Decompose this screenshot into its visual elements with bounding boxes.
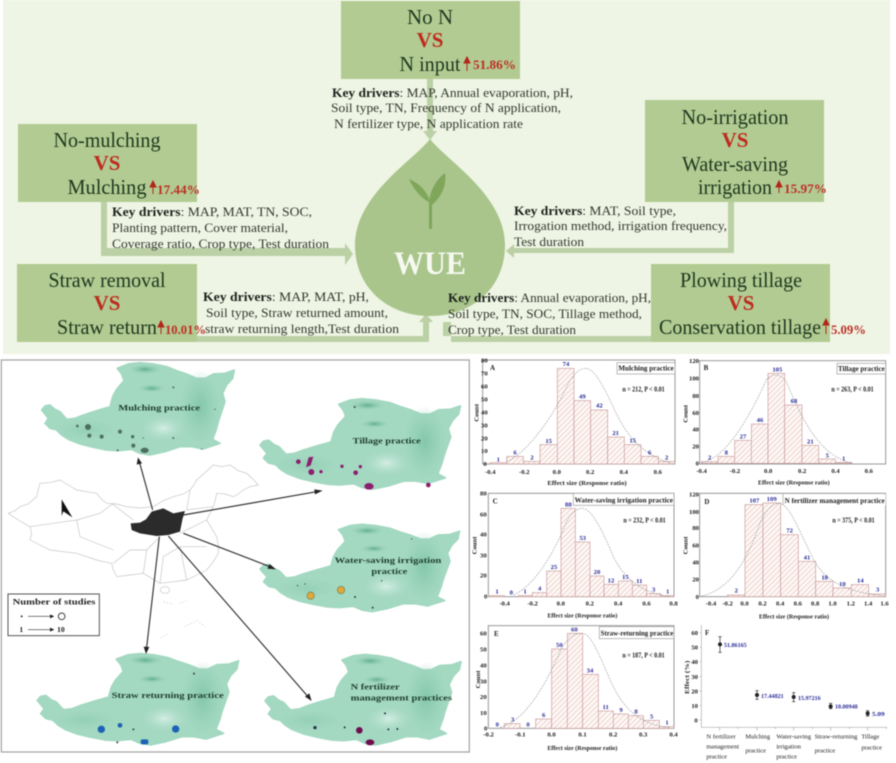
chart F: effect size by practice: 17.44821 — [761, 693, 784, 700]
chart D: N fertilizer histogram: 120 — [689, 491, 700, 498]
text: tillage key drivers: Crop type, Test duration — [448, 322, 576, 337]
chart F: effect size by practice — [684, 625, 887, 760]
chart C: water-saving irrigation histogram: 1 — [495, 589, 499, 596]
label: WUE: WUE — [394, 246, 466, 282]
chart D: N fertilizer histogram: 1.6 — [880, 601, 889, 608]
chart F: effect size by practice: 30 — [691, 674, 699, 681]
box: irrigation: VS — [722, 128, 748, 152]
arrow: conservation tillage to WUE — [440, 314, 665, 342]
chart E: straw returning histogram: Effect size (Response ratio) — [547, 745, 617, 752]
site dots — [76, 386, 216, 453]
map: mulching practice: Mulching practice — [118, 403, 200, 413]
chart B: tillage histogram: 60 — [692, 410, 700, 417]
box: tillage — [651, 264, 866, 342]
box: straw return — [17, 264, 206, 342]
map: water-saving irrigation practice: Water-saving irrigation — [335, 555, 442, 565]
chart A: mulching histogram: 0 — [483, 461, 487, 468]
text: tillage key drivers: Key drivers: Annual evaporation, pH, — [448, 290, 651, 305]
chart B: tillage histogram: 1 — [842, 455, 845, 462]
text: straw key drivers — [203, 289, 400, 336]
chart F: effect size by practice: 60 — [691, 630, 699, 637]
box: irrigation: No-irrigation — [682, 105, 789, 129]
chart C: water-saving irrigation histogram: Count — [472, 536, 479, 554]
chart C: water-saving irrigation histogram: 88 — [565, 502, 572, 509]
chart A: mulching histogram: 20 — [481, 435, 488, 442]
legend: number of studies — [8, 594, 99, 636]
legend: number of studies: 1 — [19, 625, 23, 634]
chart F: effect size by practice: 50 — [691, 645, 699, 652]
chart A: mulching histogram: 0.6 — [654, 469, 663, 476]
box: N input: N input — [400, 52, 461, 76]
chart D: N fertilizer histogram: -0.4 — [706, 601, 717, 608]
chart C: water-saving irrigation histogram: Effect size (Response ratio) — [547, 612, 617, 619]
chart A: mulching histogram: 2 — [665, 454, 669, 461]
chart E: straw returning histogram: 0.1 — [578, 732, 587, 739]
chart D: N fertilizer histogram: Effect size (Response ratio) — [759, 613, 829, 620]
chart E: straw returning histogram: Straw-returning practice — [601, 629, 673, 637]
chart D: N fertilizer histogram: 0.0 — [740, 601, 749, 608]
chart D: N fertilizer histogram: 1.2 — [847, 601, 856, 608]
chart F: effect size by practice: management — [706, 743, 739, 750]
text: mulching key drivers — [112, 204, 330, 251]
chart F: effect size by practice: practice — [745, 748, 766, 755]
chart E: straw returning histogram: 60 — [571, 626, 578, 633]
text: mulching key drivers: Key drivers: MAP, MAT, TN, SOC, — [112, 204, 312, 219]
chart D: N fertilizer histogram: 2 — [735, 588, 739, 595]
chart B: tillage histogram: 0 — [696, 461, 700, 468]
text: straw key drivers: straw returning length,Test duration — [205, 321, 400, 336]
chart F: effect size by practice: practice — [776, 753, 797, 760]
box: irrigation: Water-saving — [682, 152, 788, 176]
chart A: mulching histogram: 80 — [481, 358, 488, 365]
chart D: N fertilizer histogram: 10 — [839, 581, 846, 588]
chart A: mulching histogram — [474, 358, 675, 487]
chart F: effect size by practice: 10 — [691, 703, 699, 710]
chart E: straw returning histogram: 0.2 — [609, 732, 618, 739]
chart D: N fertilizer histogram: 20 — [692, 577, 700, 584]
chart C: water-saving irrigation histogram: 53 — [579, 535, 587, 542]
box: mulching: Mulching — [68, 175, 147, 199]
site dots — [296, 457, 431, 490]
chart C: water-saving irrigation histogram: 40 — [480, 532, 487, 539]
text: N input key drivers: Key drivers: MAP, Annual evaporation, pH, — [332, 85, 573, 100]
chart F: effect size by practice: practice — [706, 753, 727, 760]
chart E: straw returning histogram: 50 — [556, 642, 563, 649]
chart B: tillage histogram — [683, 358, 886, 486]
chart F: effect size by practice: 5.09 — [872, 711, 885, 718]
chart A: mulching histogram: 21 — [612, 430, 619, 437]
chart B: tillage histogram: 0.4 — [831, 468, 840, 475]
chart D: N fertilizer histogram: 72 — [786, 528, 794, 535]
chart B: tillage histogram: 27 — [740, 433, 747, 440]
map: straw returning practice — [37, 654, 239, 745]
chart C: water-saving irrigation histogram: 0 — [510, 590, 514, 597]
text: N input key drivers: Soil type, TN, Frequency of N application, — [331, 100, 561, 115]
chart A: mulching histogram: 40 — [481, 409, 488, 416]
chart A: mulching histogram: 42 — [596, 402, 603, 409]
chart E: straw returning histogram: 10 — [480, 710, 487, 717]
chart B: tillage histogram: 20 — [692, 443, 700, 450]
chart E: straw returning histogram: 1 — [665, 720, 669, 727]
chart C: water-saving irrigation histogram: 15 — [622, 574, 629, 581]
chart C: water-saving irrigation histogram: 20 — [480, 573, 487, 580]
chart A: mulching histogram: Count — [474, 403, 481, 422]
chart D: N fertilizer histogram: 100 — [689, 509, 700, 516]
chart D: N fertilizer histogram: 3 — [876, 587, 880, 594]
box: straw return: VS — [94, 291, 120, 315]
chart D: N fertilizer histogram: 41 — [804, 554, 810, 561]
chart E: straw returning histogram: 11 — [603, 704, 609, 711]
chart F: effect size by practice: Water-saving — [776, 734, 812, 741]
map: N fertilizer management practices: N fertilizer — [351, 682, 400, 692]
chart C: water-saving irrigation histogram: 0.4 — [614, 601, 623, 608]
chart D: N fertilizer histogram: 0 — [696, 594, 700, 601]
chart E: straw returning histogram: 0 — [496, 721, 500, 728]
chart D: N fertilizer histogram: n = 375, P < 0.01 — [832, 517, 875, 525]
box: irrigation — [645, 100, 827, 202]
icon: WUE water drop — [355, 139, 505, 316]
chart A: mulching histogram: 6 — [513, 449, 517, 456]
chart D: N fertilizer histogram: 109 — [767, 496, 777, 503]
chart E: straw returning histogram: 3 — [511, 717, 515, 724]
chart E: straw returning histogram: 34 — [587, 667, 594, 674]
chart E: straw returning histogram: 9 — [619, 707, 623, 714]
text: mulching key drivers: Coverage ratio, Crop type, Test duration — [112, 236, 330, 251]
chart E: straw returning histogram: 6 — [542, 712, 546, 719]
box: mulching: No-mulching — [54, 128, 161, 152]
chart D: N fertilizer histogram: D — [704, 498, 709, 506]
chart E: straw returning histogram: 5 — [650, 713, 654, 720]
arrow: mulching to WUE — [101, 202, 353, 265]
chart C: water-saving irrigation histogram: 30 — [480, 552, 487, 559]
chart B: tillage histogram: 2 — [708, 455, 712, 462]
box: straw return: Straw removal — [48, 268, 166, 292]
chart B: tillage histogram: 80 — [692, 393, 700, 400]
chart C: water-saving irrigation histogram: 11 — [636, 578, 642, 585]
chart C: water-saving irrigation histogram: C — [493, 497, 498, 505]
chart A: mulching histogram: 0.2 — [586, 469, 595, 476]
chart F: effect size by practice: 51.86165 — [724, 642, 747, 649]
map: straw returning practice: Straw returning practice — [112, 690, 224, 700]
chart B: tillage histogram: 120 — [689, 358, 700, 365]
box: tillage: VS — [728, 291, 754, 315]
chart C: water-saving irrigation histogram: 4 — [538, 586, 542, 593]
chart D: N fertilizer histogram: 14 — [857, 578, 864, 585]
chart C: water-saving irrigation histogram: 0.8 — [669, 601, 678, 608]
chart C: water-saving irrigation histogram: 1 — [666, 589, 669, 596]
chart C: water-saving irrigation histogram: 0.2 — [586, 601, 595, 608]
arrow: N input to WUE — [423, 79, 437, 140]
chart A: mulching histogram: 70 — [481, 371, 488, 378]
chart B: tillage histogram: 100 — [689, 376, 700, 383]
chart A: mulching histogram: -0.4 — [485, 469, 496, 476]
gain: 15.97%: 15.97% — [784, 181, 827, 196]
chart A: mulching histogram: 1 — [497, 456, 500, 463]
chart B: tillage histogram: Tillage practice — [838, 365, 885, 373]
chart A: mulching histogram: 30 — [481, 422, 488, 429]
map: N fertilizer management practices — [265, 654, 461, 745]
chart F: effect size by practice: 40 — [691, 659, 699, 666]
chart D: N fertilizer histogram: 0.2 — [758, 601, 767, 608]
chart C: water-saving irrigation histogram: 25 — [551, 564, 558, 571]
chart C: water-saving irrigation histogram: 1 — [523, 589, 527, 596]
chart D: N fertilizer histogram: 1.0 — [828, 601, 837, 608]
chart E: straw returning histogram: E — [494, 630, 499, 638]
arrows: plateau to practice maps — [137, 457, 323, 701]
chart A: mulching histogram: 10 — [481, 448, 488, 455]
chart B: tillage histogram: 8 — [725, 449, 729, 456]
chart A: mulching histogram: Effect size (Response ratio) — [547, 480, 627, 487]
chart E: straw returning histogram: 60 — [480, 631, 487, 638]
chart A: mulching histogram: 50 — [481, 397, 488, 404]
chart F: effect size by practice: 0 — [694, 717, 698, 724]
chart F: effect size by practice: irrigation — [776, 743, 802, 750]
chart F: effect size by practice: N fertilizer — [706, 734, 736, 741]
chart E: straw returning histogram: 20 — [480, 694, 487, 701]
map: mulching practice — [42, 363, 234, 455]
box: N input: No N — [407, 5, 453, 29]
box: mulching — [18, 124, 200, 202]
box: N input — [341, 1, 520, 79]
text: straw key drivers: Soil type, Straw returned amount, — [206, 305, 388, 320]
gain: 17.44%: 17.44% — [157, 182, 200, 197]
chart C: water-saving irrigation histogram: 0.0 — [557, 601, 566, 608]
text: irrigation key drivers: Test duration — [514, 234, 585, 249]
box: mulching: VS — [94, 151, 120, 175]
map: water-saving irrigation practice: practice — [371, 566, 408, 576]
site dots — [356, 727, 374, 745]
chart E: straw returning histogram: 0.4 — [669, 732, 678, 739]
text: N input key drivers: N fertilizer type, N application rate — [334, 116, 523, 131]
chart E: straw returning histogram: n = 187, P < 0.01 — [622, 651, 665, 659]
chart E: straw returning histogram: 0 — [526, 721, 530, 728]
chart E: straw returning histogram: 0.0 — [547, 732, 556, 739]
chart C: water-saving irrigation histogram: 3 — [652, 587, 656, 594]
chart A: mulching histogram: 74 — [563, 361, 570, 368]
chart B: tillage histogram: Effect size (Response ratio) — [758, 479, 830, 486]
text: irrigation key drivers: Irrogation method, irrigation frequency, — [514, 218, 727, 233]
site dots — [98, 723, 179, 744]
box: tillage: Plowing tillage — [680, 268, 802, 292]
chart D: N fertilizer histogram — [683, 491, 889, 620]
chart C: water-saving irrigation histogram — [472, 491, 678, 619]
chart B: tillage histogram: B — [704, 364, 709, 372]
chart F: effect size by practice: 10.00948 — [835, 704, 858, 711]
icon: north arrow — [62, 499, 72, 517]
text: N input key drivers — [331, 85, 573, 131]
chart E: straw returning histogram: 30 — [480, 678, 487, 685]
chart D: N fertilizer histogram: 0.8 — [811, 601, 820, 608]
box: N input: VS — [417, 28, 443, 52]
chart F: effect size by practice: practice — [815, 748, 835, 755]
map: water-saving irrigation practice — [260, 524, 460, 612]
chart B: tillage histogram: 68 — [791, 398, 798, 405]
chart A: mulching histogram: n = 212, P < 0.01 — [622, 386, 665, 394]
chart B: tillage histogram: 0.2 — [798, 468, 807, 475]
chart D: N fertilizer histogram: 80 — [692, 525, 700, 532]
chart B: tillage histogram: 105 — [772, 367, 783, 374]
chart C: water-saving irrigation histogram: -0.4 — [499, 601, 511, 608]
chart F: effect size by practice: Straw-returning — [815, 734, 858, 741]
chart A: mulching histogram: 60 — [481, 384, 488, 391]
chart C: water-saving irrigation histogram: -0.2 — [527, 601, 539, 608]
map: tillage practice: Tillage practice — [353, 435, 421, 445]
chart E: straw returning histogram — [475, 626, 678, 752]
chart A: mulching histogram: 49 — [579, 394, 586, 401]
chart C: water-saving irrigation histogram: 20 — [594, 569, 601, 576]
panel: WUE driver diagram — [3, 0, 890, 354]
chart D: N fertilizer histogram: 60 — [692, 542, 700, 549]
chart C: water-saving irrigation histogram: 12 — [608, 577, 615, 584]
chart A: mulching histogram: A — [490, 364, 495, 372]
chart D: N fertilizer histogram: 40 — [692, 560, 700, 567]
map: China outline — [8, 465, 258, 638]
box: irrigation: irrigation — [698, 175, 772, 199]
map: tillage practice — [260, 399, 460, 490]
chart D: N fertilizer histogram: N fertilizer management practice — [785, 497, 885, 505]
box: tillage: Conservation tillage — [659, 315, 821, 339]
chart B: tillage histogram: 46 — [757, 417, 764, 424]
chart C: water-saving irrigation histogram: 60 — [480, 511, 487, 518]
map: N fertilizer management practices: management practices — [351, 693, 453, 703]
chart C: water-saving irrigation histogram: 80 — [480, 491, 487, 498]
chart F: effect size by practice: practice — [861, 745, 882, 752]
chart A: mulching histogram: Mulching practice — [618, 365, 674, 373]
legend: number of studies: 10 — [57, 625, 65, 634]
chart D: N fertilizer histogram: -0.2 — [722, 601, 734, 608]
chart E: straw returning histogram: 0 — [484, 726, 488, 733]
chart F: effect size by practice: Effect (%) — [684, 661, 691, 694]
chart E: straw returning histogram: 40 — [480, 662, 487, 669]
map: Loess Plateau highlighted — [131, 508, 185, 536]
text: irrigation key drivers — [514, 203, 727, 249]
gain: 51.86%: 51.86% — [473, 57, 516, 72]
chart C: water-saving irrigation histogram: Water-saving irrigation practice — [575, 497, 673, 505]
chart F: effect size by practice: Mulching — [745, 734, 771, 741]
chart A: mulching histogram: 0.0 — [553, 469, 562, 476]
chart F: effect size by practice: 15.97216 — [798, 695, 821, 702]
chart F: effect size by practice: Tillage — [861, 734, 879, 741]
chart C: water-saving irrigation histogram: n = 232, P < 0.01 — [623, 517, 666, 525]
chart D: N fertilizer histogram: 0.6 — [794, 601, 803, 608]
chart D: N fertilizer histogram: 107 — [749, 498, 760, 505]
chart B: tillage histogram: n = 263, P < 0.01 — [831, 386, 874, 394]
chart A: mulching histogram: 15 — [545, 438, 553, 445]
chart B: tillage histogram: 0.0 — [764, 468, 773, 475]
panel: study site map — [1, 360, 469, 752]
chart D: N fertilizer histogram: 18 — [821, 574, 829, 581]
chart F: effect size by practice: F — [705, 629, 709, 637]
text: straw key drivers: Key drivers : MAP, MAT, pH, — [203, 289, 369, 304]
chart B: tillage histogram: 0.6 — [865, 468, 874, 475]
gain: 10.01%: 10.01% — [165, 322, 206, 337]
data points — [718, 637, 869, 716]
gain: 5.09% — [823, 319, 866, 337]
icon: seedling — [409, 173, 445, 229]
site dots — [307, 586, 345, 599]
chart B: tillage histogram: Count — [683, 404, 690, 423]
text: mulching key drivers: Planting pattern, Cover material, — [112, 220, 288, 235]
chart A: mulching histogram: 0.4 — [620, 469, 629, 476]
box: straw return: Straw return — [57, 315, 157, 339]
chart E: straw returning histogram: Count — [475, 670, 482, 688]
chart E: straw returning histogram: 8 — [634, 709, 638, 716]
text: tillage key drivers — [448, 290, 651, 337]
chart D: N fertilizer histogram: 0.4 — [776, 601, 785, 608]
chart A: mulching histogram: 15 — [629, 438, 637, 445]
legend: number of studies: Number of studies — [13, 597, 96, 606]
chart E: straw returning histogram: -0.1 — [515, 732, 526, 739]
chart E: straw returning histogram: 50 — [480, 647, 487, 654]
chart F: effect size by practice: 20 — [691, 688, 699, 695]
chart C: water-saving irrigation histogram: 0 — [484, 594, 488, 601]
chart B: tillage histogram: 21 — [807, 438, 814, 445]
arrow: irrigation to WUE — [506, 202, 734, 258]
chart B: tillage histogram: -0.4 — [696, 468, 708, 475]
chart B: tillage histogram: -0.2 — [730, 468, 741, 475]
gain: 5.09%: 5.09% — [831, 322, 866, 337]
chart B: tillage histogram: 40 — [692, 427, 700, 434]
chart C: water-saving irrigation histogram: 0.6 — [642, 601, 651, 608]
text: tillage key drivers: Soil type, TN, SOC, Tillage method, — [448, 306, 642, 321]
chart A: mulching histogram: -0.2 — [519, 469, 530, 476]
chart E: straw returning histogram: -0.2 — [483, 732, 495, 739]
chart A: mulching histogram: 6 — [648, 449, 652, 456]
chart D: N fertilizer histogram: 1.4 — [864, 601, 873, 608]
chart D: N fertilizer histogram: Count — [683, 536, 690, 554]
chart E: straw returning histogram: 0.3 — [639, 732, 648, 739]
arrow: straw return to WUE — [197, 314, 433, 342]
text: irrigation key drivers: Key drivers: MAT, Soil type, — [514, 203, 676, 218]
chart A: mulching histogram: 2 — [530, 454, 534, 461]
chart B: tillage histogram: 5 — [826, 452, 830, 459]
